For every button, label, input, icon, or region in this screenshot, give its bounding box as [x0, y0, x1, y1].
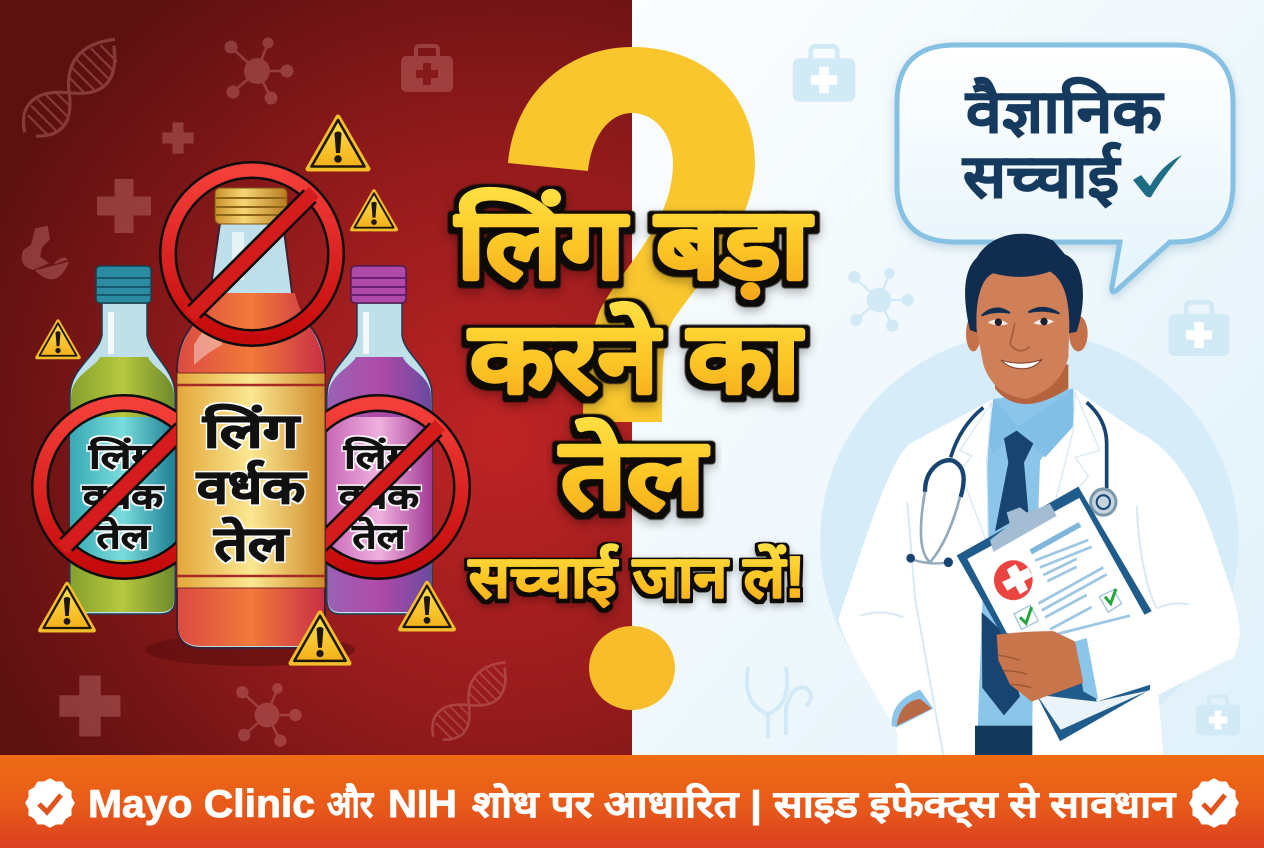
shadow under bottles: [145, 634, 355, 666]
background icons: right medical symbols: [747, 46, 1240, 738]
banner text: और: [327, 783, 375, 825]
title: main Hindi headline: [454, 188, 814, 610]
stethoscope: [906, 402, 1116, 567]
bottle: orange with gold label: वर्धक: [196, 460, 307, 513]
nose: [1010, 323, 1030, 351]
smile: [1002, 360, 1042, 369]
neck: [995, 364, 1068, 404]
icon: big question mark: [508, 47, 755, 710]
banner text: [88, 783, 1177, 828]
banner text: NIH: [388, 783, 457, 826]
title: main Hindi headline: तेल: [559, 418, 709, 529]
bottle: purple with pink label: लिंग: [343, 436, 414, 476]
collar: [988, 389, 1073, 457]
background icons: left medical symbols: [13, 29, 520, 750]
ears: [966, 316, 981, 351]
bottle: purple with pink label: [327, 266, 432, 614]
hair: [965, 234, 1083, 334]
title: main Hindi headline: करने का: [468, 302, 804, 413]
bottle: green with teal label: वर्धक: [82, 476, 165, 516]
bottle: orange with gold label: लिंग: [202, 404, 301, 457]
eyes: [988, 319, 1054, 325]
eyebrows: [982, 308, 1059, 316]
icon: check mark: [1133, 155, 1182, 197]
coat lapels: [960, 392, 1100, 547]
icon: prohibition sign top: [168, 170, 336, 338]
face: [976, 272, 1069, 399]
panel: red myth background: [0, 0, 632, 756]
illustration: three banned oil bottles: [40, 170, 462, 666]
icon: right verified badge: [1190, 779, 1238, 827]
icon: left verified badge: [26, 779, 74, 827]
bottle: purple with pink label: तेल: [351, 516, 408, 556]
footer banner: [0, 755, 1264, 848]
white coat: [838, 389, 1240, 755]
banner text: Mayo Clinic: [88, 783, 315, 826]
icon: prohibition sign left: [40, 403, 208, 571]
title: main Hindi headline: लिंग बड़ा: [454, 188, 814, 299]
tie: [982, 431, 1033, 715]
subtitle: सच्चाई जान लें!: [468, 544, 805, 610]
callout: speech bubble: [897, 45, 1233, 292]
arm and hand: [892, 602, 1241, 727]
panel: light science background: [632, 0, 1264, 756]
bottle: purple with pink label: वर्धक: [338, 476, 421, 516]
bottle: green with teal label: [70, 266, 175, 614]
bottle: orange with gold label: [177, 188, 325, 648]
shirt: [977, 389, 1073, 755]
icon: warning triangles: [37, 117, 454, 663]
bottle: green with teal label: तेल: [95, 516, 152, 556]
illustration: doctor with clipboard: [820, 234, 1241, 757]
bottle: green with teal label: लिंग: [88, 436, 159, 476]
callout: speech bubble: सच्चाई: [962, 142, 1122, 210]
halo circle: [820, 332, 1239, 751]
banner text: शोध पर आधारित | साइड इफेक्ट्स से सावधान: [472, 783, 1177, 828]
callout: speech bubble: वैज्ञानिक: [965, 77, 1164, 145]
icon: prohibition sign right: [294, 403, 462, 571]
trouser: [975, 726, 1032, 757]
bottle: orange with gold label: तेल: [213, 517, 290, 570]
clipboard: [957, 487, 1153, 741]
